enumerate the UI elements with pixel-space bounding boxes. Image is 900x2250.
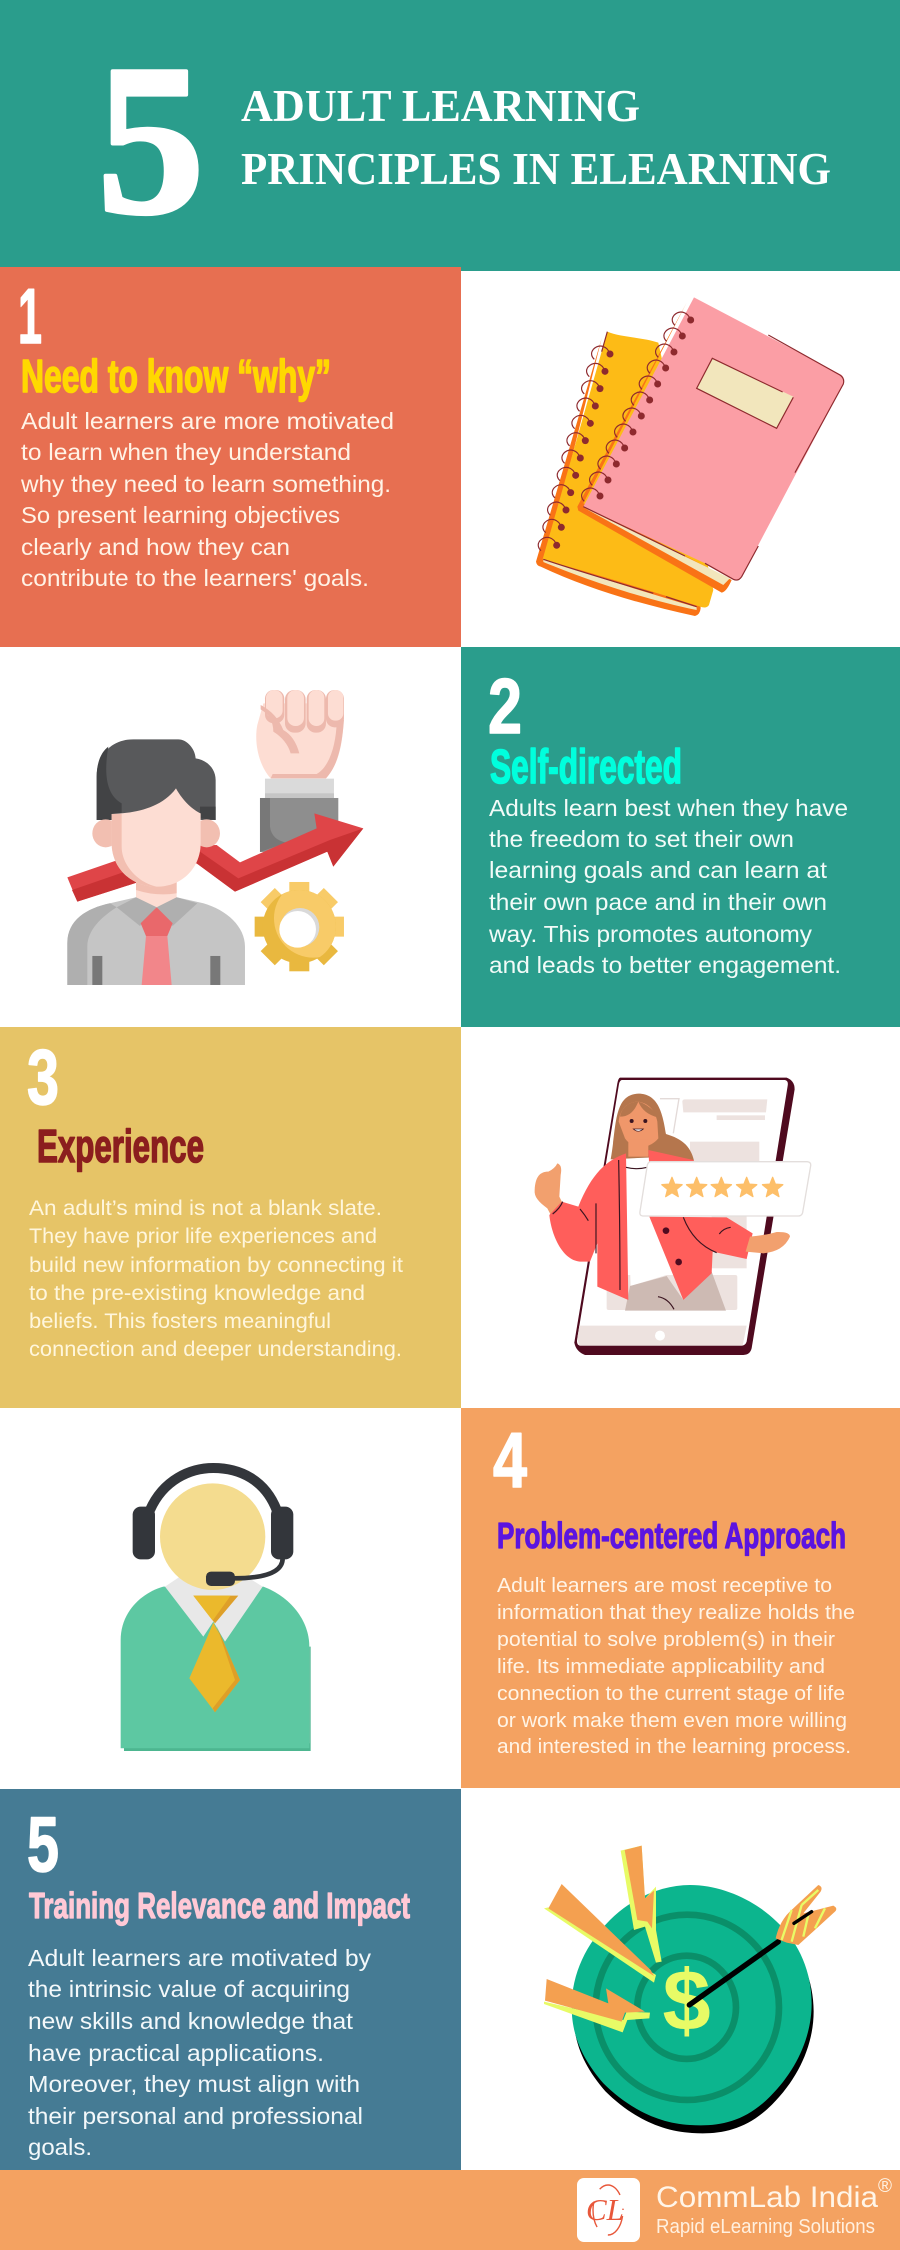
body text: to learn when they understand xyxy=(21,439,351,465)
body text: the freedom to set their own xyxy=(489,826,794,852)
man xyxy=(67,739,245,985)
body text: Adult learners are more motivated xyxy=(21,408,394,434)
rating card xyxy=(640,1162,811,1216)
number 4: 4 xyxy=(493,1416,527,1504)
heading: self-directed: Self-directed xyxy=(490,741,682,794)
icon: notebooks xyxy=(536,297,844,616)
icon: support agent with headset xyxy=(121,1468,311,1751)
woman xyxy=(535,1094,790,1311)
body text: or work make them even more willing xyxy=(497,1710,847,1732)
body text: connection and deeper understanding. xyxy=(29,1338,402,1361)
body text: Adult learners are motivated by xyxy=(28,1945,372,1971)
body text: An adult’s mind is not a blank slate. xyxy=(29,1197,382,1220)
icon: woman in phone with star rating xyxy=(535,1078,811,1355)
body text: to the pre-existing knowledge and xyxy=(29,1282,365,1305)
title xyxy=(241,80,831,194)
body text: contribute to the learners' goals. xyxy=(21,565,369,591)
body text: new skills and knowledge that xyxy=(28,2008,354,2034)
body text xyxy=(20,408,394,591)
body text: learning goals and can learn at xyxy=(489,857,828,883)
icon: target with dollar and arrow xyxy=(544,1846,836,2133)
gear xyxy=(254,882,344,972)
header band xyxy=(0,0,900,271)
body text: information that they realize holds the xyxy=(497,1602,855,1624)
tagline: Rapid eLearning Solutions xyxy=(656,2216,875,2238)
body text: Adults learn best when they have xyxy=(489,795,848,821)
CommLab logo mark: CL xyxy=(586,2192,624,2227)
dollar sign: $ xyxy=(663,1953,711,2049)
body text: clearly and how they can xyxy=(21,534,290,560)
body text: way. This promotes autonomy xyxy=(488,921,813,947)
panel: training relevance and impact xyxy=(0,1789,461,2170)
heading: experience: Experience xyxy=(37,1120,204,1172)
panel: self-directed xyxy=(461,647,900,1027)
body text: beliefs. This fosters meaningful xyxy=(29,1310,331,1333)
number 1: 1 xyxy=(18,272,42,360)
title: ADULT LEARNING xyxy=(241,80,640,131)
sleeve xyxy=(260,779,338,852)
arrow xyxy=(689,1885,836,2005)
heading: need to know why: Need to know “why” xyxy=(21,350,331,402)
body text: potential to solve problem(s) in their xyxy=(497,1629,835,1651)
body text xyxy=(28,1945,372,2160)
body text: So present learning objectives xyxy=(21,502,340,528)
body text xyxy=(497,1575,855,1758)
footer band xyxy=(0,2170,900,2250)
body text: why they need to learn something. xyxy=(20,471,391,497)
title: PRINCIPLES IN ELEARNING xyxy=(241,143,831,194)
body text: life. Its immediate applicability and xyxy=(497,1656,825,1678)
heading: training relevance and impact: Training Relevance and Impact xyxy=(29,1885,410,1926)
body text: their personal and professional xyxy=(28,2103,363,2129)
panel: experience xyxy=(0,1027,461,1408)
fist xyxy=(256,690,344,778)
phone xyxy=(574,1078,795,1355)
body text: the intrinsic value of acquiring xyxy=(28,1976,350,2002)
number 5: 5 xyxy=(27,1800,59,1888)
brand name: CommLab India xyxy=(656,2181,878,2214)
lightning darts xyxy=(544,1846,662,2032)
body text xyxy=(488,795,848,978)
body text: connection to the current stage of life xyxy=(497,1683,845,1705)
arrow xyxy=(67,813,363,902)
body text: and leads to better engagement. xyxy=(489,952,841,978)
panel: problem-centered approach xyxy=(461,1408,900,1788)
body text: build new information by connecting it xyxy=(29,1254,403,1277)
icon: businessman with fist, arrow and gear xyxy=(67,690,363,985)
body text: their own pace and in their own xyxy=(489,889,827,915)
body text: Adult learners are most receptive to xyxy=(497,1575,832,1597)
registered mark: ® xyxy=(878,2176,892,2197)
big number 5: 5 xyxy=(97,20,204,259)
body text: goals. xyxy=(28,2134,92,2160)
CommLab logo mark xyxy=(577,2178,640,2242)
body text: and interested in the learning process. xyxy=(497,1736,851,1758)
panel: need to know why xyxy=(0,267,461,647)
body text xyxy=(29,1197,403,1361)
body text: have practical applications. xyxy=(28,2040,324,2066)
body text: They have prior life experiences and xyxy=(29,1225,377,1248)
number 2: 2 xyxy=(488,662,522,750)
number 3: 3 xyxy=(27,1033,59,1121)
body text: Moreover, they must align with xyxy=(28,2071,360,2097)
